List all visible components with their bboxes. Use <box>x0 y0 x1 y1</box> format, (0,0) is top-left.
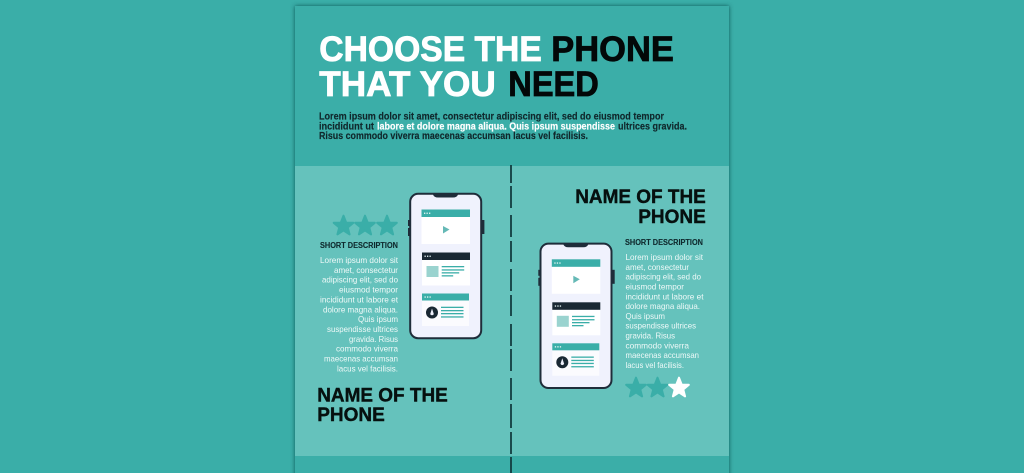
profile card <box>552 343 599 376</box>
intro text: Lorem ipsum dolor sit amet, consectetur adipiscing elit, sed do eiusmod tempor <box>319 111 664 122</box>
intro text: ultrices gravida. <box>618 121 687 132</box>
article card <box>552 302 600 335</box>
poster card <box>295 6 729 473</box>
description text <box>320 255 399 373</box>
description text: gravida. Risus <box>626 330 675 340</box>
description text: suspendisse ultrices <box>626 321 696 331</box>
description text: dolore magna aliqua. <box>626 301 700 311</box>
description text: incididunt ut labore et <box>320 294 399 304</box>
description text: maecenas accumsan <box>324 354 398 364</box>
phone name: NAME OF THE <box>575 186 706 208</box>
phone name <box>317 385 448 426</box>
description text: dolore magna aliqua. <box>323 304 398 314</box>
description text: amet, consectetur <box>334 265 398 275</box>
rating: two of three stars <box>626 378 689 396</box>
title <box>319 30 674 104</box>
phone name: PHONE <box>317 404 385 426</box>
description text: suspendisse ultrices <box>327 324 398 334</box>
description text: commodo viverra <box>626 340 689 350</box>
description text: maecenas accumsan <box>626 350 699 360</box>
description text: eiusmod tempor <box>626 281 684 291</box>
short description heading: SHORT DESCRIPTION <box>320 240 398 250</box>
phone name: NAME OF THE <box>317 385 448 407</box>
short description heading: SHORT DESCRIPTION <box>625 237 703 247</box>
rating: three stars <box>334 216 397 234</box>
description text: adipiscing elit, sed do <box>322 275 398 285</box>
intro text: Risus commodo viverra maecenas accumsan lacus vel facilisis. <box>319 131 588 142</box>
left phone column <box>317 194 484 426</box>
title: PHONE <box>551 30 674 69</box>
icon: smartphone left <box>408 194 484 338</box>
intro text <box>319 111 687 142</box>
header panel <box>319 30 687 142</box>
video card <box>552 259 600 294</box>
icon: smartphone right <box>538 243 615 388</box>
description text: eiusmod tempor <box>339 285 398 295</box>
intro text: labore et dolore magna aliqua. Quis ipsum suspendisse <box>377 121 615 132</box>
description text: lacus vel facilisis. <box>337 363 398 373</box>
title: NEED <box>508 65 599 104</box>
phone name <box>575 186 706 228</box>
description text: incididunt ut labore et <box>626 291 704 301</box>
description text: Lorem ipsum dolor sit <box>626 252 704 262</box>
article card <box>422 252 470 286</box>
description text: adipiscing elit, sed do <box>626 272 701 282</box>
description text: Quis ipsum <box>358 314 398 324</box>
description text: commodo viverra <box>336 344 398 354</box>
description text: Quis ipsum <box>626 311 665 321</box>
title: THAT YOU <box>319 65 496 104</box>
video card <box>422 210 470 244</box>
description text: gravida. Risus <box>349 334 398 344</box>
description text: lacus vel facilisis. <box>626 360 684 370</box>
phone name: PHONE <box>638 206 706 228</box>
profile card <box>422 294 469 326</box>
description text: Lorem ipsum dolor sit <box>320 255 399 265</box>
centre dashed divider <box>510 165 512 473</box>
title: CHOOSE THE <box>319 30 542 69</box>
intro text: incididunt ut <box>319 121 375 132</box>
comparison panel background <box>295 166 729 456</box>
description text: amet, consectetur <box>626 262 689 272</box>
description text <box>626 252 704 370</box>
right phone column <box>538 186 706 396</box>
